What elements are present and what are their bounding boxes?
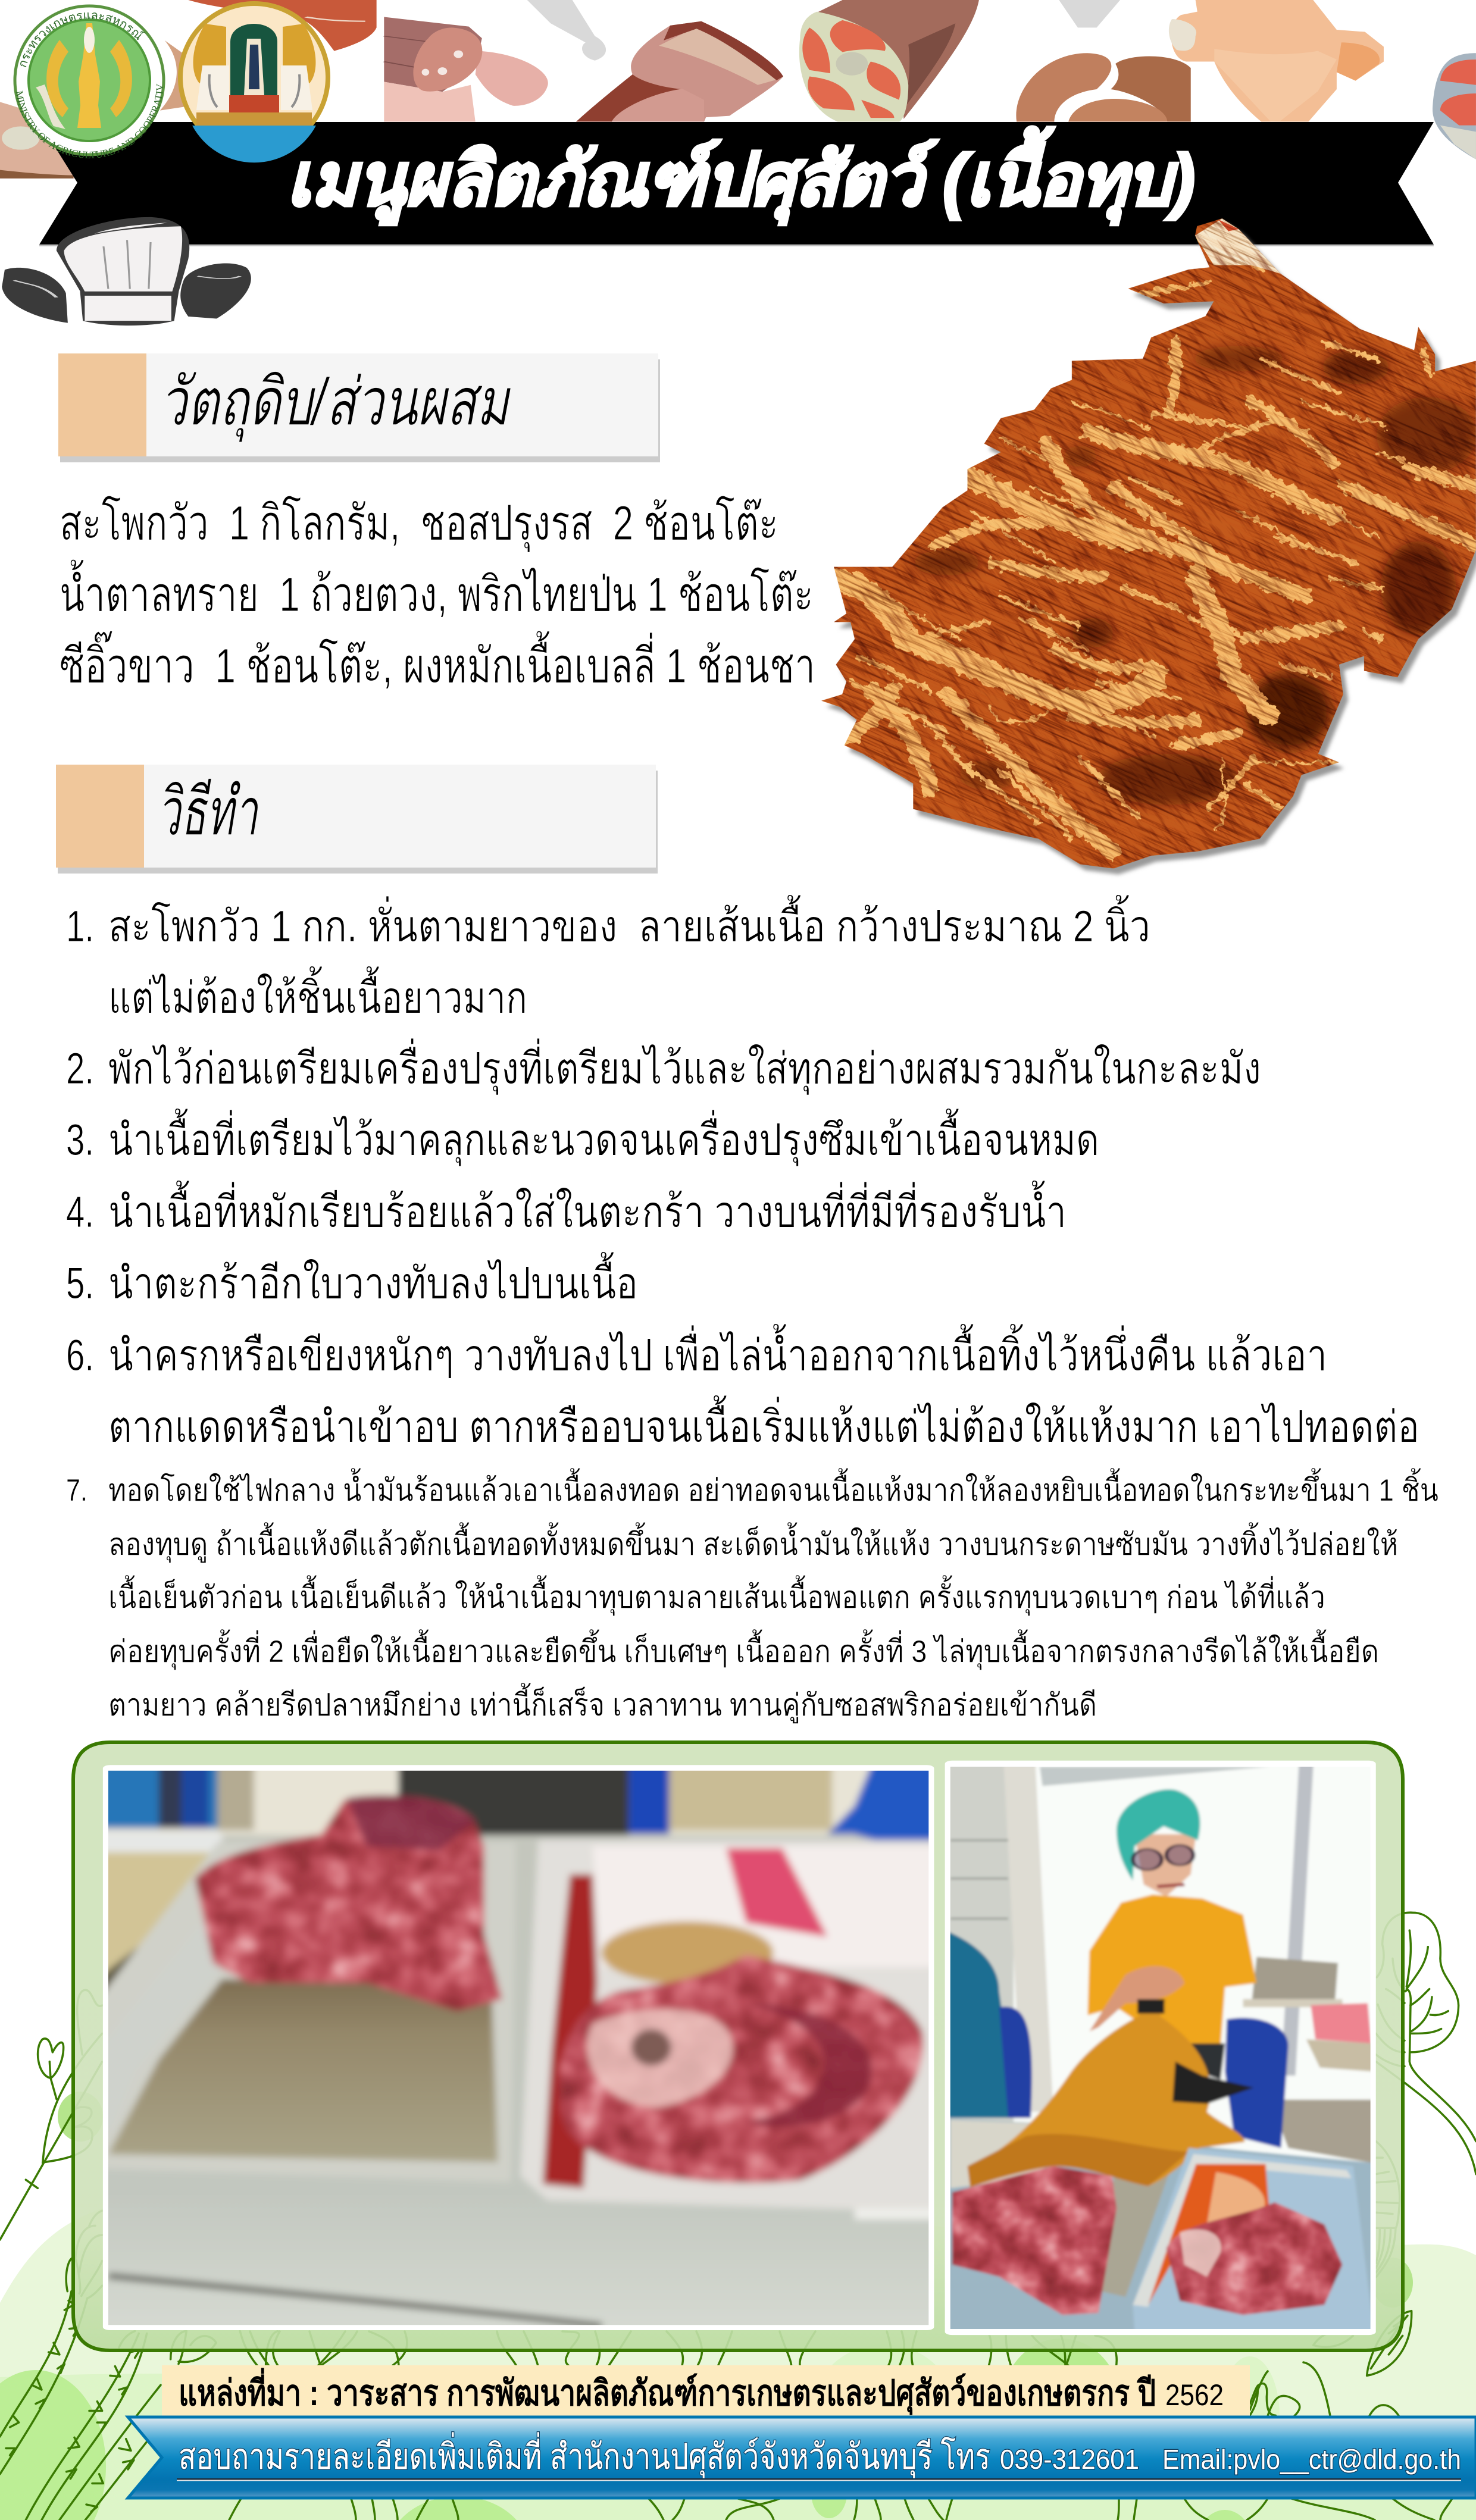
text block: method steps 1 to 6: 5. xyxy=(66,1259,94,1308)
text block: method steps 1 to 6: 3. xyxy=(66,1115,94,1164)
text block: method step 7: 7. xyxy=(66,1473,87,1508)
text block: method step 7 xyxy=(66,1468,1439,1724)
text block: ingredients list xyxy=(60,496,815,693)
right tray xyxy=(520,1840,954,2212)
meat dark patches xyxy=(913,346,1476,804)
text block: ingredients list: น้ำตาลทราย 1 ถ้วยตวง, พริกไทยป่น 1 ช้อนโต๊ะ xyxy=(60,559,814,622)
illustration: left meat cuts xyxy=(0,0,377,179)
background green hills xyxy=(0,2092,1476,2520)
text block: method steps 1 to 6: แต่ไม่ต้องให้ชิ้นเนื้อยาวมาก xyxy=(108,966,527,1022)
left meat xyxy=(952,2166,1117,2315)
meat gold fibre bundles xyxy=(838,240,1476,852)
woman xyxy=(1087,1895,1256,2048)
illustration: chicken piece xyxy=(1169,0,1384,122)
text block: ingredients list: สะโพกวัว 1 กิโลกรัม, ชอสปรุงรส 2 ช้อนโต๊ะ xyxy=(60,496,778,553)
contact banner: สอบถามรายละเอียดเพิ่มเติมที่ สำนักงานปศุสัตว์จังหวัดจันทบุรี โทร xyxy=(179,2432,990,2478)
right tray xyxy=(1133,2148,1374,2333)
text block: method steps 1 to 6: 6. xyxy=(66,1331,94,1380)
title: เมนูผลิตภัณฑ์ปศุสัตว์ (เนื้อทุบ) xyxy=(287,126,1195,225)
text block: method steps 1 to 6: 4. xyxy=(66,1187,94,1236)
table xyxy=(936,2118,1387,2333)
text block: method steps 1 to 6: นำเนื้อที่หมักเรียบร้อยแล้วใส่ในตะกร้า วางบนที่ที่มีที่รองรับน้ำ xyxy=(108,1180,1067,1236)
text block: method steps 1 to 6: นำตะกร้าอีกใบวางทับลงไปบนเนื้อ xyxy=(108,1251,638,1308)
photo: raw beef on trays xyxy=(87,1762,954,2333)
contact banner xyxy=(128,2417,1476,2498)
meat pale tip xyxy=(1195,218,1281,274)
text block: ingredients list: ซีอิ๊วขาว 1 ช้อนโต๊ะ, ผงหมักเนื้อเบลลี่ 1 ช้อนชา xyxy=(60,631,815,693)
left tray xyxy=(87,1842,516,2182)
counter line xyxy=(108,2276,602,2326)
source note: แหล่งที่มา : วาระสาร การพัฒนาผลิตภัณฑ์การเกษตรและปศุสัตว์ของเกษตรกร ปี xyxy=(179,2368,1156,2415)
title banner xyxy=(39,122,1434,246)
plant line drawings: left xyxy=(0,1990,278,2520)
header food illustrations xyxy=(0,0,1476,179)
illustration: grey fork and knife silhouettes xyxy=(527,0,1120,61)
source note: 2562 xyxy=(1165,2378,1224,2412)
illustration: salami and ham xyxy=(384,17,548,122)
logo: Department of Livestock Development xyxy=(180,4,328,162)
text block: method steps 1 to 6: นำเนื้อที่เตรียมไว้มาคลุกและนวดจนเครื่องปรุงซึมเข้าเนื้อจนหมด xyxy=(108,1108,1099,1167)
illustration: meat leg cross-section xyxy=(799,0,979,122)
text block: method steps 1 to 6: สะโพกวัว 1 กก. หั่นตามยาวของ ลายเส้นเนื้อ กว้างประมาณ 2 นิ้ว xyxy=(108,894,1150,951)
text block: method steps 1 to 6 xyxy=(66,894,1419,1451)
heading: method xyxy=(56,765,658,874)
photo: shredded pounded beef xyxy=(821,218,1476,877)
left meat xyxy=(195,1795,502,2011)
panel: photo frame xyxy=(73,1742,1403,2350)
text block: method steps 1 to 6: พักไว้ก่อนเตรียมเครื่องปรุงที่เตรียมไว้และใส่ทุกอย่างผสมรวมกันในกะละมัง xyxy=(108,1038,1261,1095)
illustration: right meat slice xyxy=(1433,53,1476,159)
illustration: sliced ham xyxy=(576,21,783,122)
text block: method steps 1 to 6: 1. xyxy=(66,901,94,951)
illustration: sausage xyxy=(1016,53,1191,122)
icon: chef hat with steaks xyxy=(2,217,251,325)
text block: method step 7: เนื้อเย็นตัวก่อน เนื้อเย็นดีแล้ว ให้นำเนื้อมาทุบตามลายเส้นเนื้อพอแตก ครั้งแรกทุบนวดเบาๆ ก่อน ได้ที่แล้ว xyxy=(108,1575,1325,1616)
contact banner: Email:pvlo__ctr@dld.go.th xyxy=(1162,2444,1461,2475)
source note xyxy=(162,2365,1250,2419)
text block: method step 7: ตามยาว คล้ายรีดปลาหมึกย่าง เท่านี้ก็เสร็จ เวลาทาน ทานคู่กับซอสพริกอร่อยเข้ากันดี xyxy=(108,1683,1097,1724)
plant line drawings: lower middle xyxy=(229,2331,1452,2520)
pig head xyxy=(968,1999,1245,2187)
heading: ingredients xyxy=(58,353,660,462)
logo: Ministry of Agriculture and Cooperatives: กระทรวงเกษตรและสหกรณ์ xyxy=(20,12,145,67)
plant line drawings: right xyxy=(1250,1912,1476,2417)
contact banner: 039-312601 xyxy=(1000,2444,1139,2475)
text block: method steps 1 to 6: 2. xyxy=(66,1044,94,1093)
heading: ingredients: วัตถุดิบ/ส่วนผสม xyxy=(160,365,511,443)
heading: method: วิธีทำ xyxy=(157,775,259,849)
photo: farmer holding pig head xyxy=(936,1761,1387,2335)
